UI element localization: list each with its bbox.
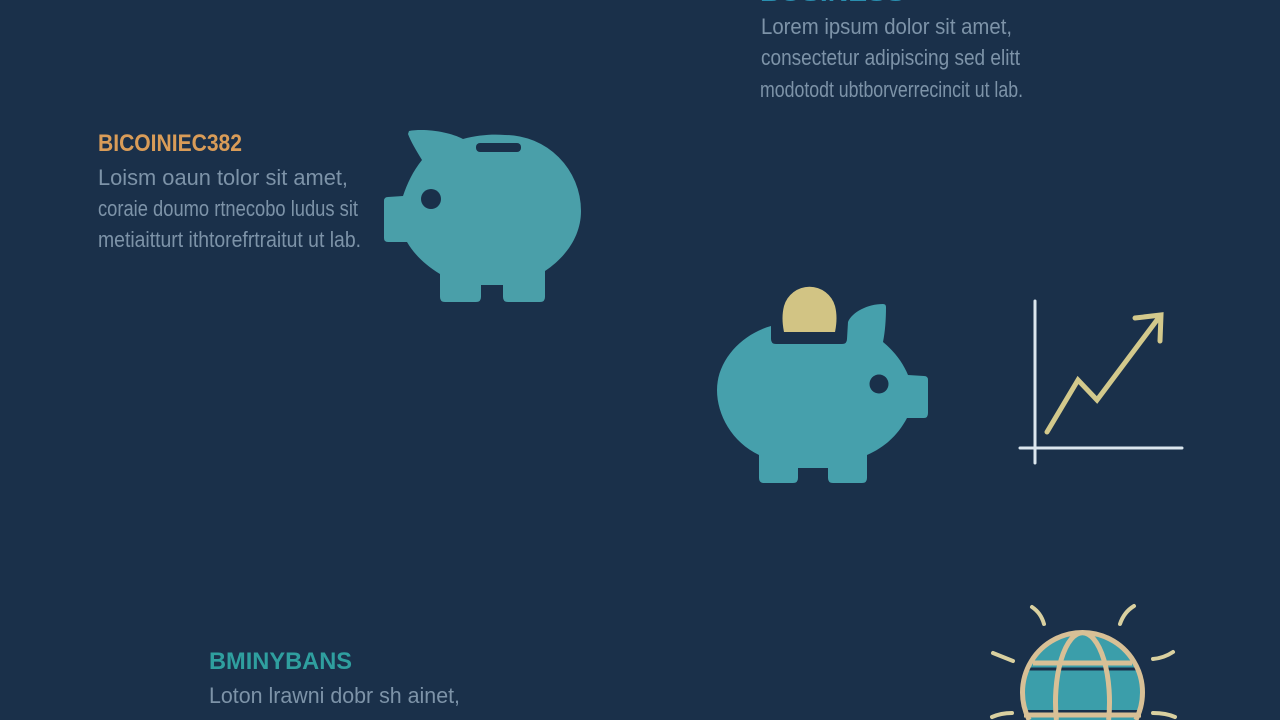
eye <box>870 374 888 394</box>
globe lines <box>1023 632 1142 720</box>
icon: piggy bank with coin <box>717 287 928 483</box>
text block: top right: modotodt ubtborverrecincit ut lab. <box>760 77 1023 102</box>
text block: orange heading left: coraie doumo rtnecobo ludus sit <box>98 196 358 221</box>
rays <box>992 606 1175 717</box>
eye <box>421 189 441 209</box>
text block: top right: consectetur adipiscing sed elitt <box>761 45 1020 70</box>
text block: top right <box>760 0 1023 102</box>
rising arrow <box>1047 315 1161 432</box>
text block: orange heading left: metiaitturt ithtorefrtraitut ut lab. <box>98 227 361 252</box>
coin <box>782 287 836 332</box>
icon: globe with rays <box>992 606 1175 720</box>
pig body <box>717 304 928 483</box>
icon: piggy bank left <box>384 130 581 302</box>
globe shadow lines <box>1024 669 1141 712</box>
text block: orange heading left <box>98 130 361 252</box>
axes <box>1020 301 1182 463</box>
text block: teal heading bottom <box>209 648 460 708</box>
text block: top right: Lorem ipsum dolor sit amet, <box>761 14 1012 39</box>
text block: orange heading left: BICOINIEC382 <box>98 130 242 157</box>
text block: teal heading bottom: Loton lrawni dobr sh ainet, <box>209 683 460 708</box>
text block: orange heading left: Loism oaun tolor sit amet, <box>98 165 348 190</box>
text block: teal heading bottom: BMINYBANS <box>209 648 352 675</box>
icon: growth chart <box>1020 301 1182 463</box>
globe fill <box>1022 632 1144 720</box>
slot <box>476 143 521 152</box>
